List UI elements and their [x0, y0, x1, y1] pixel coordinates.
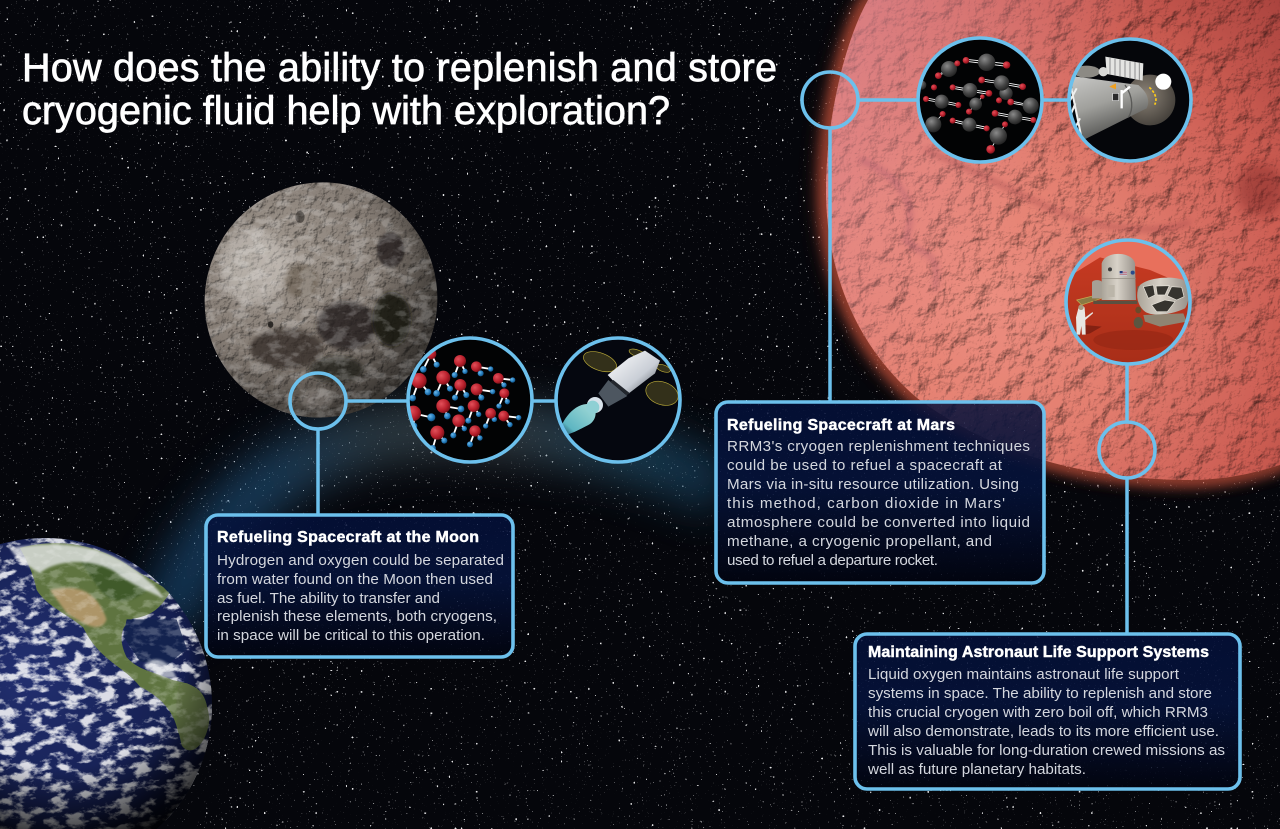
panel: Refueling Spacecraft at the Moon [206, 515, 513, 657]
Moon [204, 182, 438, 418]
body text: Moon panel [217, 552, 504, 644]
body text: Mars panel: methane, a cryogenic propellant, and [727, 533, 992, 550]
locator ring on Mars surface [1099, 422, 1155, 478]
Earth [0, 530, 220, 829]
locator ring on the Moon [290, 373, 346, 429]
transfer trail haze from Earth past the Moon to Mars [165, 428, 725, 625]
panel: Maintaining Astronaut Life Support Systems [855, 634, 1240, 789]
Mars planet [810, 0, 1280, 490]
icon: spacecraft firing engine near the Moon [556, 338, 682, 462]
body text: Mars panel: used to refuel a departure rocket. [727, 552, 938, 569]
body text: Mars panel: atmosphere could be converted into liquid [727, 514, 1030, 531]
icon: water molecules [406, 338, 532, 462]
body text: Moon panel: in space will be critical to this operation. [217, 627, 485, 644]
body text: Life support panel: systems in space. The ability to replenish and store [868, 685, 1212, 702]
body text: Life support panel: Liquid oxygen maintains astronaut life support [868, 666, 1180, 683]
icon: in-space cryogen servicing satellite [1067, 39, 1191, 161]
body text: Moon panel: Hydrogen and oxygen could be separated [217, 552, 504, 569]
body text: Life support panel: will also demonstrate, leads to its more efficient use. [867, 723, 1219, 740]
body text: Life support panel: This is valuable for long-duration crewed missions as [868, 742, 1225, 759]
icon: Mars surface habitat with astronaut and rover [1063, 240, 1197, 364]
heading: Moon panel: Refueling Spacecraft at the Moon [217, 529, 479, 546]
icon: carbon dioxide molecules [917, 38, 1042, 162]
body text: Moon panel: from water found on the Moon then used [217, 571, 493, 588]
North America landmass [10, 543, 209, 750]
body text: Mars panel: could be used to refuel a spacecraft at [727, 457, 1003, 474]
body text: Life support panel: well as future planetary habitats. [867, 761, 1086, 778]
body text: Mars panel [727, 438, 1030, 569]
title [22, 46, 777, 133]
title: How does the ability to replenish and store [22, 46, 777, 90]
heading: Mars panel: Refueling Spacecraft at Mars [727, 417, 955, 434]
heading: Life support panel: Maintaining Astronaut Life Support Systems [868, 644, 1209, 661]
body text: Mars panel: RRM3's cryogen replenishment techniques [727, 438, 1030, 455]
body text: Moon panel: as fuel. The ability to transfer and [217, 590, 440, 607]
body text: Mars panel: Mars via in-situ resource utilization. Using [727, 476, 1019, 493]
connector lines [318, 100, 1127, 634]
body text: Mars panel: this method, carbon dioxide in Mars' [727, 495, 1005, 512]
body text: Life support panel [867, 666, 1225, 778]
body text: Life support panel: this crucial cryogen with zero boil off, which RRM3 [868, 704, 1208, 721]
title: cryogenic fluid help with exploration? [22, 89, 670, 133]
panel: Refueling Spacecraft at Mars [716, 402, 1044, 583]
locator ring on Mars limb [802, 72, 858, 128]
body text: Moon panel: replenish these elements, both cryogens, [217, 608, 497, 625]
